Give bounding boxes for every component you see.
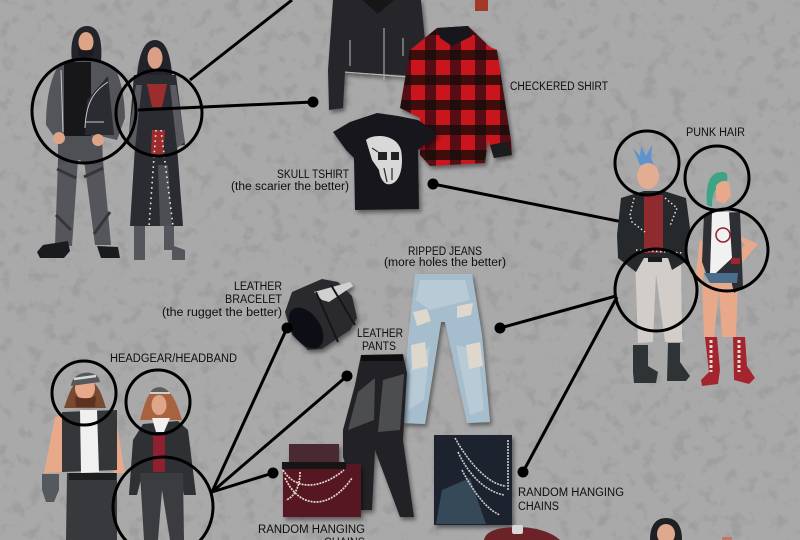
item: skull tshirt — [333, 113, 438, 210]
circle: punk man hair — [615, 131, 679, 195]
item: leather pants — [343, 354, 414, 517]
illustration: bottom figure fragment — [722, 537, 732, 540]
metal woman — [128, 40, 185, 260]
circle: metal man torso — [32, 59, 136, 163]
label: headgear: HEADGEAR/HEADBAND — [110, 353, 237, 365]
label: ripped jeans: RIPPED JEANS — [408, 246, 482, 258]
circle: biker woman pants — [113, 457, 213, 540]
circle: metal woman torso — [116, 70, 202, 156]
circle: biker woman headgear — [126, 370, 190, 434]
illustration: bottom figure head — [650, 518, 682, 540]
connector: metal jacket — [190, 0, 292, 80]
label: checkered shirt: CHECKERED SHIRT — [510, 81, 608, 93]
circle: biker man headgear — [52, 361, 116, 425]
label: leather pants line two: PANTS — [362, 341, 396, 353]
metal man — [37, 26, 125, 258]
label: skull tshirt: SKULL TSHIRT — [277, 169, 349, 181]
biker woman — [129, 387, 196, 540]
label: random hanging chains left: RANDOM HANGING — [258, 524, 365, 536]
label: skull tshirt note: (the scarier the better) — [231, 181, 349, 193]
circle: punk man pants — [615, 249, 697, 331]
connector: belt chains to biker — [212, 468, 278, 492]
circle: punk woman vest — [686, 209, 768, 291]
item: red sleeve fragment — [475, 0, 488, 11]
label: leather pants: LEATHER — [357, 328, 403, 340]
item: checkered shirt — [400, 26, 512, 166]
connector: ripped jeans to punk — [494, 296, 616, 334]
label: leather bracelet note: (the rugget the better) — [162, 307, 282, 319]
connector: skull tshirt / shirt — [138, 96, 318, 110]
connector: hanging chains to punk — [518, 297, 617, 478]
item: leather bracelet — [281, 279, 357, 355]
connector: leather pants to biker — [212, 370, 352, 492]
connector: skull tshirt to punk — [428, 178, 688, 235]
illustration: metal couple — [37, 26, 185, 260]
item: leather jacket — [328, 0, 426, 110]
illustration: biker couple — [42, 373, 196, 540]
label: punk hair: PUNK HAIR — [686, 127, 745, 139]
label: leather bracelet: LEATHER — [234, 281, 282, 293]
illustration: punk couple — [617, 145, 758, 386]
punk man — [617, 145, 690, 383]
connector: bracelet to biker — [212, 322, 292, 492]
label: chains right line two: CHAINS — [518, 501, 559, 513]
circle: punk woman hair — [685, 146, 749, 210]
biker man — [42, 373, 125, 540]
punk woman — [695, 172, 758, 386]
label: ripped jeans note: (more holes the better) — [384, 257, 506, 269]
item: jeans with chains — [434, 435, 512, 525]
label: leather bracelet line two: BRACELET — [225, 294, 282, 306]
item: ripped jeans — [402, 274, 490, 424]
item: red leather bracelet fragment — [484, 525, 560, 540]
label: random hanging chains right: RANDOM HANGING — [518, 487, 624, 499]
item: red belt with chains — [282, 444, 361, 517]
